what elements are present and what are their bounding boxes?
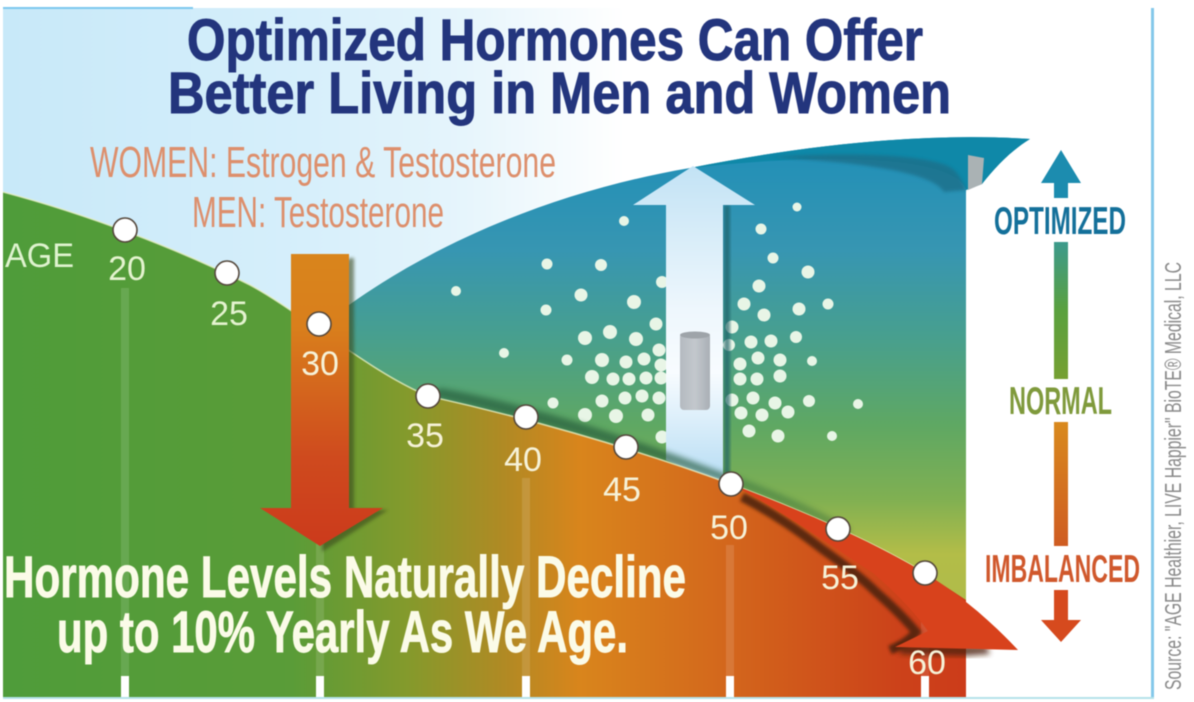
title: Optimized Hormones Can Offer xyxy=(187,8,923,73)
declining ground area xyxy=(3,192,966,697)
age labels: 25 xyxy=(210,295,248,333)
age labels: 35 xyxy=(406,417,444,455)
molecule dots xyxy=(451,202,863,444)
age labels: 50 xyxy=(710,509,748,547)
hormones subtitle xyxy=(90,138,556,237)
age grid lines and ticks xyxy=(121,288,929,697)
legend normal: NORMAL xyxy=(1009,380,1112,423)
optimized teal region with swoosh xyxy=(349,137,1030,640)
legend up arrow xyxy=(1041,150,1081,198)
down arrow xyxy=(260,254,388,552)
age labels: 30 xyxy=(301,345,339,383)
up arrow xyxy=(633,166,755,488)
age labels xyxy=(5,237,946,682)
swoosh fold xyxy=(968,155,984,190)
age labels: 45 xyxy=(603,471,641,509)
age labels: 40 xyxy=(504,441,542,479)
title xyxy=(168,8,951,126)
title: Better Living in Men and Women xyxy=(168,61,951,126)
decline statement: up to 10% Yearly As We Age. xyxy=(57,600,628,665)
legend lower bar xyxy=(1054,422,1068,546)
age labels: AGE xyxy=(5,237,74,275)
hormones subtitle: WOMEN: Estrogen & Testosterone xyxy=(90,138,556,187)
age labels: 55 xyxy=(821,559,859,597)
hormones subtitle: MEN: Testosterone xyxy=(192,188,444,237)
age labels: 60 xyxy=(908,644,946,682)
decline statement: Hormone Levels Naturally Decline xyxy=(4,545,686,610)
legend down arrow xyxy=(1041,590,1081,642)
red decline swoosh xyxy=(731,484,1018,656)
legend scale xyxy=(985,150,1140,642)
age markers xyxy=(113,218,937,585)
legend upper bar xyxy=(1054,242,1068,379)
age labels: 20 xyxy=(108,250,146,288)
decline statement xyxy=(4,545,686,665)
implant pellet xyxy=(680,332,710,410)
source credit: Source: "AGE Healthier, LIVE Happier" BioTE® Medical, LLC xyxy=(1160,262,1186,690)
